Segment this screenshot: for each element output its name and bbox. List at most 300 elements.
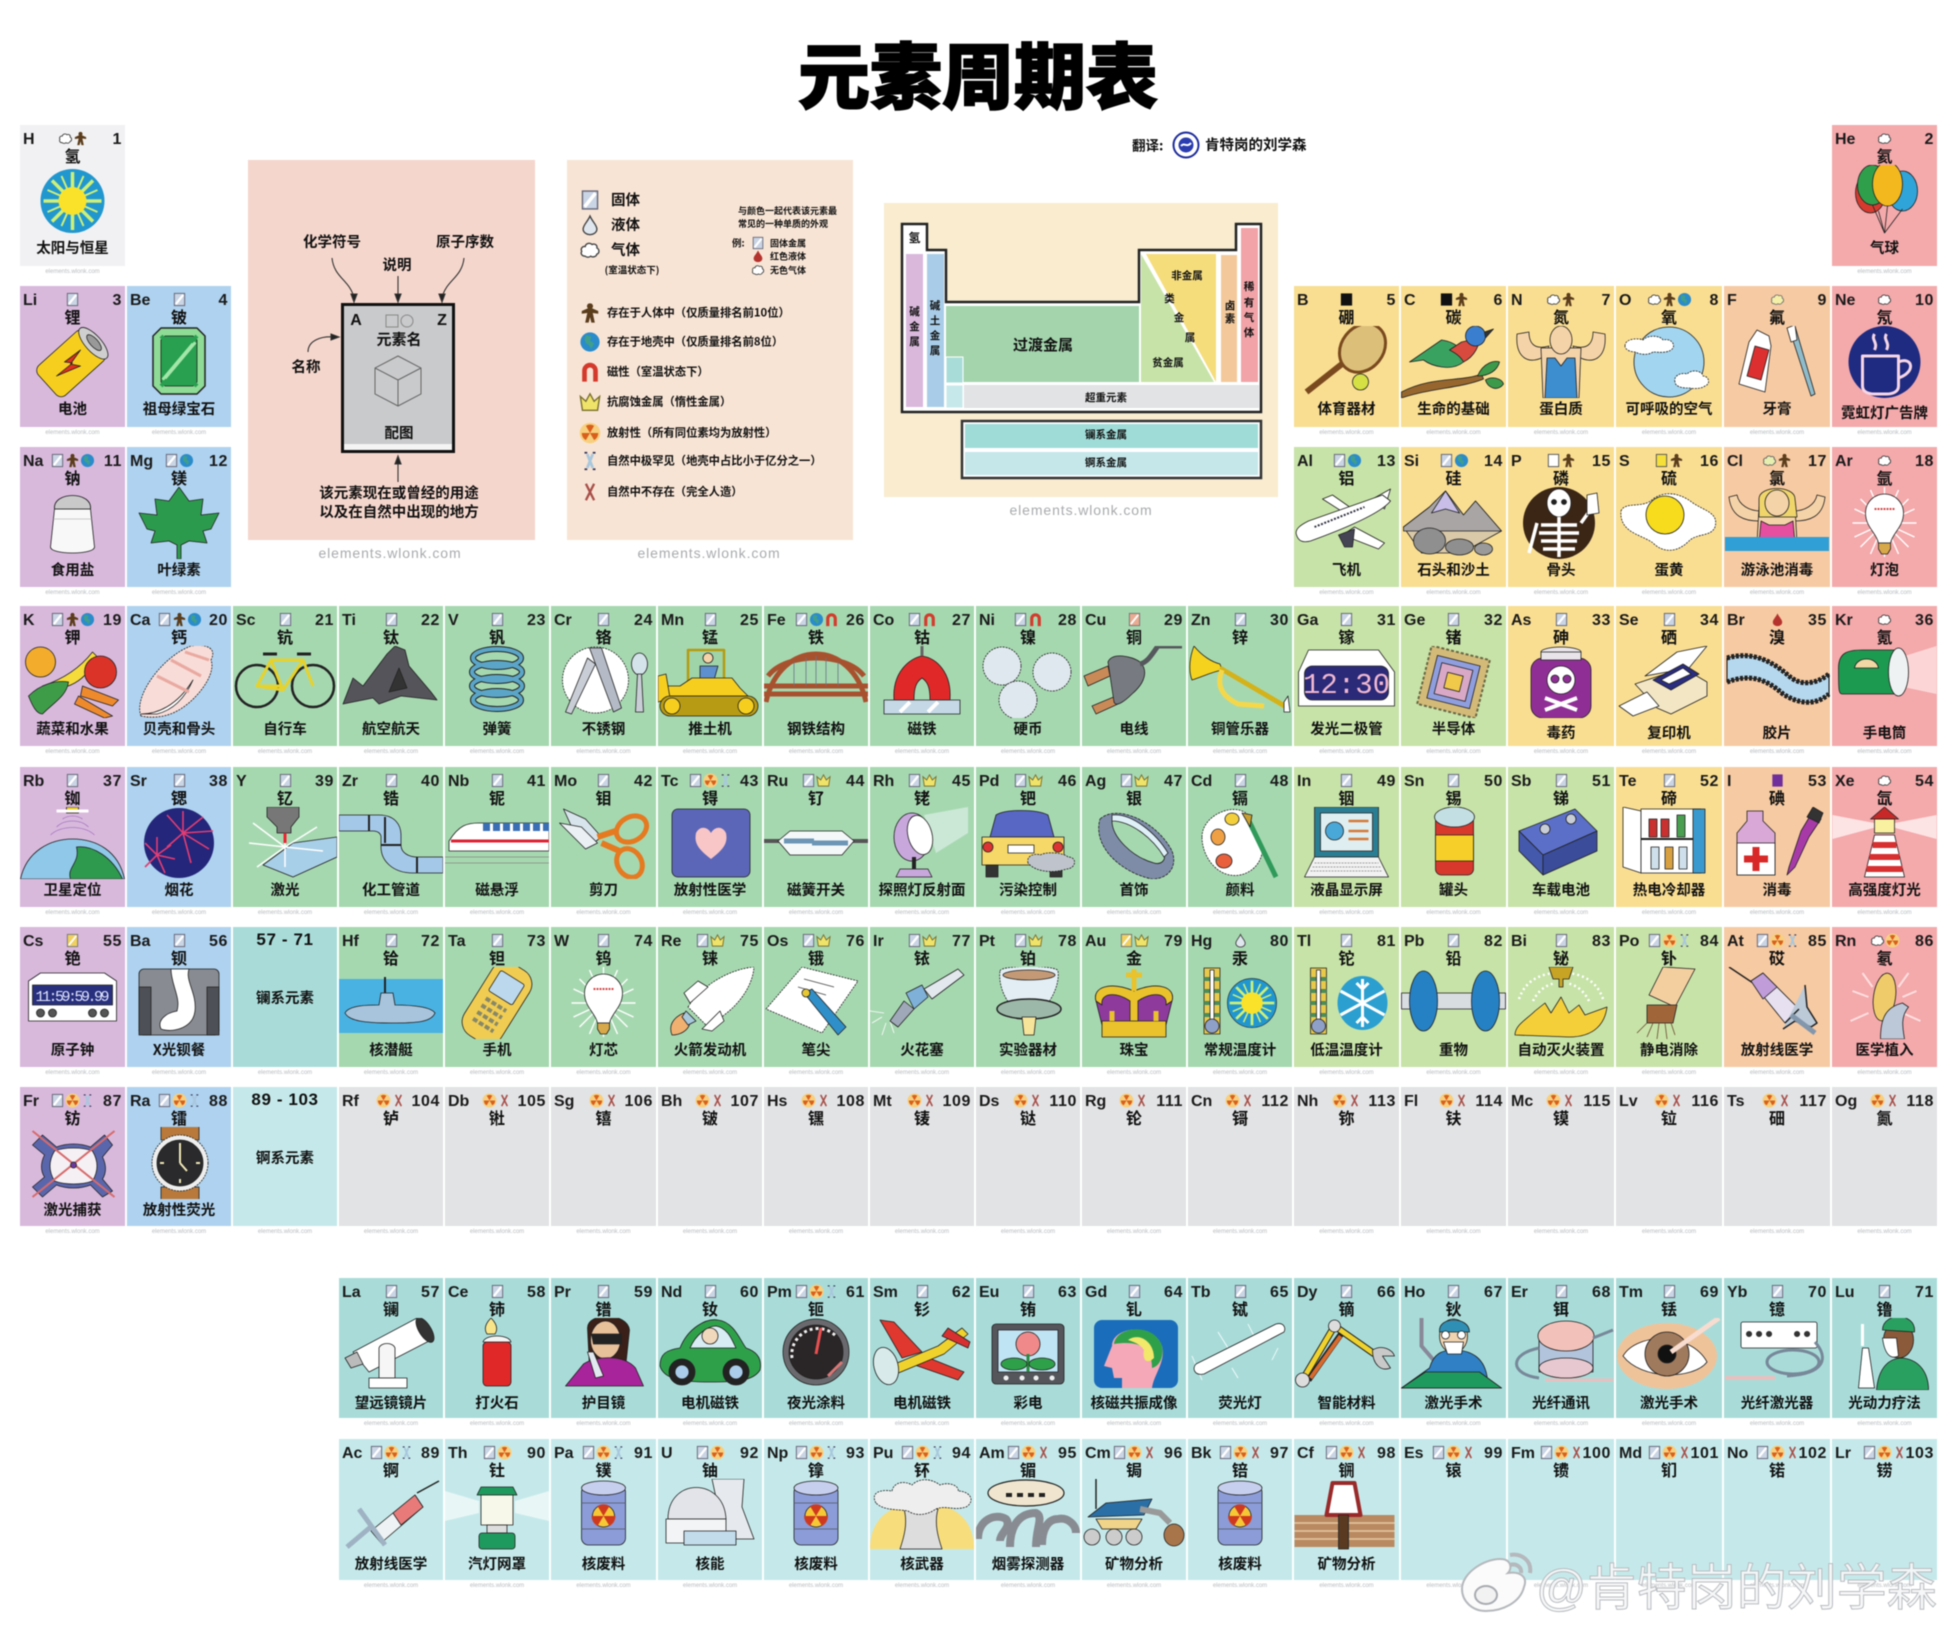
text: elements.wlonk.com (683, 1229, 737, 1235)
element: Ir: 铱 (914, 945, 930, 969)
element: Db (445, 1087, 549, 1226)
icon: plate and cutlery (551, 646, 656, 718)
element: Sg (551, 1087, 656, 1226)
text: elements.wlonk.com (1534, 1070, 1588, 1076)
icon: muscle man (1516, 325, 1606, 399)
element: Pa: 核废料 (582, 1553, 625, 1574)
element: Au (1082, 927, 1186, 1067)
element: Rn: 86 (1915, 933, 1934, 950)
element: Tb: Tb (1191, 1284, 1211, 1301)
element: Pr: 护目镜 (582, 1392, 625, 1413)
credit name: 肯特岗的刘学森 (1205, 134, 1306, 155)
icon: lab crucible (976, 967, 1080, 1039)
text: elements.wlonk.com (152, 430, 206, 436)
element: Sb: 51 (1592, 773, 1611, 790)
element: Pu (870, 1439, 974, 1580)
element: Cr: 24 (634, 612, 653, 629)
element: Co: 磁铁 (908, 718, 936, 739)
element: Am: Am (979, 1445, 1005, 1462)
element: Nh (1294, 1087, 1399, 1226)
element: Ne: 10 (1915, 292, 1934, 309)
icon: mobile phone (445, 967, 549, 1039)
element: Nd: 60 (740, 1284, 759, 1301)
category map diagram: 属 (1185, 330, 1195, 345)
text: elements.wlonk.com (152, 749, 206, 755)
element: Ni: 镍 (1020, 624, 1036, 648)
text: elements.wlonk.com (1319, 1229, 1374, 1235)
element: Rh: 45 (952, 773, 971, 790)
element: Al: 铝 (1338, 465, 1354, 489)
element: Rf: 𬬻 (383, 1105, 399, 1129)
icon: radioactive (579, 422, 601, 444)
category map diagram: 属 (930, 343, 940, 358)
element: Ac (339, 1439, 443, 1580)
icon: laser surgeon (1401, 1318, 1506, 1390)
sample symbol A: A (350, 312, 362, 329)
element: Tc: 43 (740, 773, 759, 790)
text: elements.wlonk.com (470, 910, 524, 916)
element: Sg: 𬭳 (595, 1105, 612, 1129)
element: Ra: 镭 (171, 1105, 187, 1129)
text: elements.wlonk.com (1319, 590, 1374, 596)
element: Tb: 65 (1270, 1284, 1289, 1301)
text: elements.wlonk.com (789, 1421, 843, 1427)
element: Ca: Ca (130, 612, 150, 629)
icon: battery (36, 326, 110, 398)
text: elements.wlonk.com (364, 1583, 418, 1589)
element: Ts: 鿬 (1769, 1105, 1785, 1129)
element: Rf: Rf (342, 1093, 359, 1110)
element: Ts (1724, 1087, 1830, 1226)
element: Hf (339, 927, 443, 1067)
element: Np: 镎 (808, 1457, 824, 1481)
element: Ag: 首饰 (1120, 879, 1148, 900)
element: Ag: 47 (1164, 773, 1183, 790)
text: elements.wlonk.com (789, 1583, 843, 1589)
element: Cs: Cs (23, 933, 43, 950)
element: Zn: 锌 (1232, 624, 1248, 648)
icon: fire sprinkler (1508, 967, 1614, 1039)
element: Sr: 38 (209, 773, 228, 790)
text: elements.wlonk.com (1750, 910, 1804, 916)
text: elements.wlonk.com (895, 910, 949, 916)
element: Pr (551, 1278, 656, 1418)
element: Dy (1294, 1278, 1399, 1418)
element: Nb: 磁悬浮 (475, 879, 519, 900)
label: name: 名称 (292, 356, 320, 377)
element: Dy: 镝 (1338, 1296, 1354, 1320)
element: Ce: Ce (448, 1284, 468, 1301)
text: elements.wlonk.com (1319, 430, 1374, 436)
text: elements.wlonk.com (1107, 1421, 1161, 1427)
text: elements.wlonk.com (1001, 1229, 1055, 1235)
element: Po: 钋 (1661, 945, 1677, 969)
text: elements.wlonk.com (45, 1070, 100, 1076)
element: In: 49 (1377, 773, 1396, 790)
element: Rb: 37 (103, 773, 122, 790)
element: Fl: Fl (1404, 1093, 1418, 1110)
element: Ne: 氖 (1876, 304, 1892, 328)
element: Na: 食用盐 (51, 559, 94, 580)
element: Ca: 钙 (171, 624, 187, 648)
element: Rb: 铷 (64, 785, 80, 809)
icon: LED clock (1294, 646, 1399, 718)
element: Li: 锂 (64, 304, 80, 328)
text: elements.wlonk.com (45, 1229, 100, 1235)
element: C: 碳 (1445, 304, 1462, 328)
icon: jet aircraft (339, 646, 443, 718)
element: Au: 金 (1126, 945, 1142, 969)
element: Pb (1401, 927, 1506, 1067)
text: elements.wlonk.com (1001, 1421, 1055, 1427)
text: elements.wlonk.com (683, 749, 737, 755)
text: elements.wlonk.com (152, 910, 206, 916)
text: elements.wlonk.com (1750, 590, 1804, 596)
icon: scissors (551, 807, 656, 879)
lanthanide placeholder cell (233, 927, 337, 1067)
text: elements.wlonk.com (152, 590, 206, 596)
element: Sc: Sc (236, 612, 256, 629)
element: Ce (445, 1278, 549, 1418)
element: Pd: 钯 (1020, 785, 1036, 809)
category map diagram: 体 (1244, 325, 1255, 340)
text: elements.wlonk.com (1857, 910, 1912, 916)
icon: robotic arm (1294, 1318, 1399, 1390)
element: Md: 101 (1690, 1445, 1719, 1462)
element: F (1724, 286, 1830, 427)
element: Zn: Zn (1191, 612, 1211, 629)
icon: bicycle (233, 646, 337, 718)
icon: MRI scan of head (1082, 1318, 1186, 1390)
element: Ho: 67 (1484, 1284, 1503, 1301)
element: Tc: Tc (661, 773, 678, 790)
element: Tm (1616, 1278, 1722, 1418)
element: Sr: Sr (130, 773, 147, 790)
element: Ta: 手机 (482, 1039, 512, 1060)
category map diagram: 非金属 (1171, 268, 1203, 283)
element: Db: 𬭊 (489, 1105, 505, 1129)
element: Gd: 钆 (1126, 1296, 1142, 1320)
element: Ru: Ru (767, 773, 788, 790)
element: U (658, 1439, 762, 1580)
legend example label: 例: (732, 235, 745, 249)
element: Pd: 污染控制 (999, 879, 1057, 900)
explanation text (319, 482, 479, 522)
text: elements.wlonk.com (1750, 1421, 1804, 1427)
icon: rare (584, 451, 596, 471)
diagram arrows (306, 257, 466, 483)
text: elements.wlonk.com (1750, 1583, 1804, 1589)
element: Rb: Rb (23, 773, 44, 790)
element: Ge: 半导体 (1432, 718, 1475, 739)
element: Si (1401, 447, 1506, 587)
element: Cd: 48 (1270, 773, 1289, 790)
label: chemical symbol: 化学符号 (303, 231, 361, 252)
text: elements.wlonk.com (1107, 1070, 1161, 1076)
element: N: 蛋白质 (1539, 398, 1583, 419)
element: Nb: Nb (448, 773, 469, 790)
element: Pb: 82 (1484, 933, 1503, 950)
element: Ni (976, 606, 1080, 746)
text: elements.wlonk.com (1426, 1070, 1481, 1076)
element: Mn: Mn (661, 612, 684, 629)
icon: tin can (1401, 807, 1506, 879)
element: La: 57 (421, 1284, 440, 1301)
legend: liquid: 液体 (611, 214, 640, 235)
element: Ti: 航空航天 (362, 718, 420, 739)
icon: mini fridge (1616, 807, 1722, 879)
element: Fl (1401, 1087, 1506, 1226)
text: elements.wlonk.com (1107, 749, 1161, 755)
element: Tm: 69 (1700, 1284, 1719, 1301)
element: B: B (1297, 292, 1309, 309)
text: elements.wlonk.com (45, 590, 100, 596)
text: elements.wlonk.com (1107, 1583, 1161, 1589)
icon: coins (976, 646, 1080, 718)
element: Y: Y (236, 773, 247, 790)
text: elements.wlonk.com (1642, 1229, 1696, 1235)
text: elements.wlonk.com (1426, 430, 1481, 436)
text: elements.wlonk.com (1534, 749, 1588, 755)
legend: gas: 气体 (611, 239, 640, 260)
element: Zr (339, 767, 443, 907)
element: Eu: 彩电 (1014, 1392, 1042, 1413)
element: Rn: 氡 (1876, 945, 1892, 969)
element: Np: Np (767, 1445, 788, 1462)
element: Be: Be (130, 292, 150, 309)
text: elements.wlonk.com (576, 749, 631, 755)
element: K (20, 606, 125, 746)
element: O: 可呼吸的空气 (1626, 398, 1712, 419)
element: Cf: 锎 (1338, 1457, 1354, 1481)
icon: nuclear waste barrel (551, 1479, 656, 1551)
element: Lu (1832, 1278, 1937, 1418)
element: Cr: Cr (554, 612, 572, 629)
element: Cl: 游泳池消毒 (1741, 559, 1813, 580)
icon: leaf (138, 486, 220, 560)
element: Y: 钇 (277, 785, 293, 809)
element: Ag: 银 (1126, 785, 1142, 809)
legend: earth crust: 存在于地壳中（仅质量排名前8位） (607, 333, 783, 349)
explanation text: 以及在自然中出现的地方 (319, 501, 479, 522)
element: Ti: 钛 (383, 624, 399, 648)
element: Gd: 核磁共振成像 (1090, 1392, 1178, 1413)
element: Pu: 94 (952, 1445, 971, 1462)
element: He: 气球 (1870, 237, 1899, 258)
icon: thermometer and snowflake (1294, 967, 1399, 1039)
text: elements.wlonk.com (895, 1070, 949, 1076)
element: Np: 核废料 (794, 1553, 838, 1574)
icon: radium watch (127, 1127, 231, 1199)
element: O: 氧 (1661, 304, 1677, 328)
legend: noble metals: 抗腐蚀金属（惰性金属） (607, 393, 731, 409)
element: Ba: 钡 (171, 945, 187, 969)
element: Sc: 21 (315, 612, 334, 629)
element: Md: Md (1619, 1445, 1642, 1462)
element: Eu: 63 (1058, 1284, 1077, 1301)
element: Ru: 44 (846, 773, 865, 790)
element: Mc: 115 (1583, 1093, 1611, 1110)
icon: liquid (582, 214, 598, 236)
element: Am (976, 1439, 1080, 1580)
element: Tm: Tm (1619, 1284, 1643, 1301)
text: elements.wlonk.com (1213, 1229, 1267, 1235)
text: elements.wlonk.com (683, 1421, 737, 1427)
icon: example solid (752, 236, 764, 250)
text: elements.wlonk.com (1642, 1070, 1696, 1076)
icon: atomic clock (20, 967, 125, 1039)
element: N: N (1511, 292, 1523, 309)
element: Pu: 核武器 (900, 1553, 944, 1574)
element: Fr: 87 (103, 1093, 122, 1110)
element: Zr: 化工管道 (362, 879, 420, 900)
icon: anti-static brush (1616, 967, 1722, 1039)
element: Mo (551, 767, 656, 907)
element: Cn (1188, 1087, 1292, 1226)
icon: mushroom cloud (870, 1479, 974, 1551)
element: Re: 铼 (702, 945, 718, 969)
element: Fe: 26 (846, 612, 865, 629)
element: Np: 93 (846, 1445, 865, 1462)
element: Ir: 77 (952, 933, 971, 950)
element: Sc: 钪 (277, 624, 293, 648)
category map diagram: 超重元素 (1085, 390, 1127, 405)
element: Cn: 112 (1261, 1093, 1289, 1110)
element: Cm: Cm (1085, 1445, 1111, 1462)
element: Po: Po (1619, 933, 1639, 950)
element: S: S (1619, 453, 1630, 470)
text: elements.wlonk.com (1426, 1229, 1481, 1235)
element: Sr: 锶 (171, 785, 187, 809)
element: Gd (1082, 1278, 1186, 1418)
element: Cd (1188, 767, 1292, 907)
element: Na: Na (23, 453, 43, 470)
element: B: 体育器材 (1318, 398, 1376, 419)
label: atomic number: 原子序数 (436, 231, 494, 252)
element: Ga: 31 (1377, 612, 1396, 629)
text: elements.wlonk.com (1857, 1070, 1912, 1076)
text: elements.wlonk.com (1534, 430, 1588, 436)
icon: reed switch (764, 807, 868, 879)
element: Tl: Tl (1297, 933, 1311, 950)
category map diagram: 金 (909, 319, 920, 334)
element: Ho (1401, 1278, 1506, 1418)
panel: how to read an element cell (248, 160, 535, 540)
element: B: 硼 (1338, 304, 1354, 328)
element: I: 53 (1808, 773, 1827, 790)
element: Mn: 锰 (702, 624, 718, 648)
element: Rg: Rg (1085, 1093, 1106, 1110)
element: Fl: 𫓧 (1445, 1105, 1462, 1129)
icon: example liquid (752, 250, 763, 263)
element: Ba: Ba (130, 933, 150, 950)
element: Ti (339, 606, 443, 746)
element: Fm: Fm (1511, 1445, 1535, 1462)
element: Re: Re (661, 933, 681, 950)
icon: lighthouse (1832, 807, 1937, 879)
element: Rn (1832, 927, 1937, 1067)
element: Og: 118 (1906, 1093, 1934, 1110)
category map diagram: 金 (930, 328, 941, 343)
element: Kr (1832, 606, 1937, 746)
element: Au: 79 (1164, 933, 1183, 950)
element: Mt: 鿏 (914, 1105, 930, 1129)
element: Cf: 矿物分析 (1318, 1553, 1376, 1574)
icon: rocket engine (658, 967, 762, 1039)
element: Hg: 常规温度计 (1204, 1039, 1276, 1060)
icon: atomic clock: 11:59:59.99 (36, 989, 110, 1006)
element: Pr: 59 (634, 1284, 653, 1301)
element: At: 85 (1808, 933, 1827, 950)
element: P: 15 (1592, 453, 1611, 470)
element: Pu: Pu (873, 1445, 893, 1462)
text: elements.wlonk.com (45, 269, 100, 275)
element: Pm: 钷 (808, 1296, 824, 1320)
element: Cl: 氯 (1769, 465, 1785, 489)
text: elements.wlonk.com (895, 749, 949, 755)
element: Th: 汽灯网罩 (468, 1553, 526, 1574)
text: elements.wlonk.com (1642, 749, 1696, 755)
element: Pm: 61 (846, 1284, 865, 1301)
element: Kr: 手电筒 (1863, 722, 1906, 743)
element: W: 灯芯 (589, 1039, 618, 1060)
element: P: P (1511, 453, 1522, 470)
element: Re (658, 927, 762, 1067)
element: Au: 珠宝 (1120, 1039, 1148, 1060)
element: Ac: 89 (421, 1445, 440, 1462)
element: Ag (1082, 767, 1186, 907)
text: elements.wlonk.com (895, 1421, 949, 1427)
element: La: La (342, 1284, 361, 1301)
element: Ga: 发光二极管 (1310, 718, 1383, 739)
element: Rh: 铑 (914, 785, 930, 809)
element: O (1616, 286, 1722, 427)
element: Bk: Bk (1191, 1445, 1211, 1462)
icon: cube (374, 355, 422, 407)
text: elements.wlonk.com (1642, 910, 1696, 916)
element: Pa (551, 1439, 656, 1580)
element: Rh: 探照灯反射面 (878, 879, 966, 900)
element: Li: 电池 (58, 398, 87, 419)
element: Ac: Ac (342, 1445, 362, 1462)
element: S: 蛋黄 (1654, 559, 1684, 580)
text: elements.wlonk.com (1857, 1583, 1912, 1589)
element: W (551, 927, 656, 1067)
element: H: 氢 (64, 143, 80, 167)
element: Y: 39 (315, 773, 334, 790)
element: Si: 14 (1484, 453, 1503, 470)
icon: balloons (1854, 164, 1919, 234)
text: elements.wlonk.com (1426, 749, 1481, 755)
element: U: U (661, 1445, 673, 1462)
element: C: 6 (1494, 292, 1503, 309)
text: elements.wlonk.com (1001, 1583, 1055, 1589)
icon: telescope (339, 1318, 443, 1390)
icon: laser trap (20, 1127, 125, 1199)
text: elements.wlonk.com (1750, 1070, 1804, 1076)
element: C (1401, 286, 1506, 427)
text: elements.wlonk.com (683, 1070, 737, 1076)
element: W: W (554, 933, 569, 950)
element: Sr: 烟花 (164, 879, 194, 900)
icon: solid (581, 190, 599, 210)
icon: iodine bottle and dropper (1724, 807, 1830, 879)
text: elements.wlonk.com (1426, 1583, 1481, 1589)
legend: extremely rare: 自然中极罕见（地壳中占比小于亿分之一） (607, 452, 822, 468)
text: elements.wlonk.com (470, 1229, 524, 1235)
element: Ru: 钌 (808, 785, 824, 809)
element: No: No (1727, 1445, 1748, 1462)
